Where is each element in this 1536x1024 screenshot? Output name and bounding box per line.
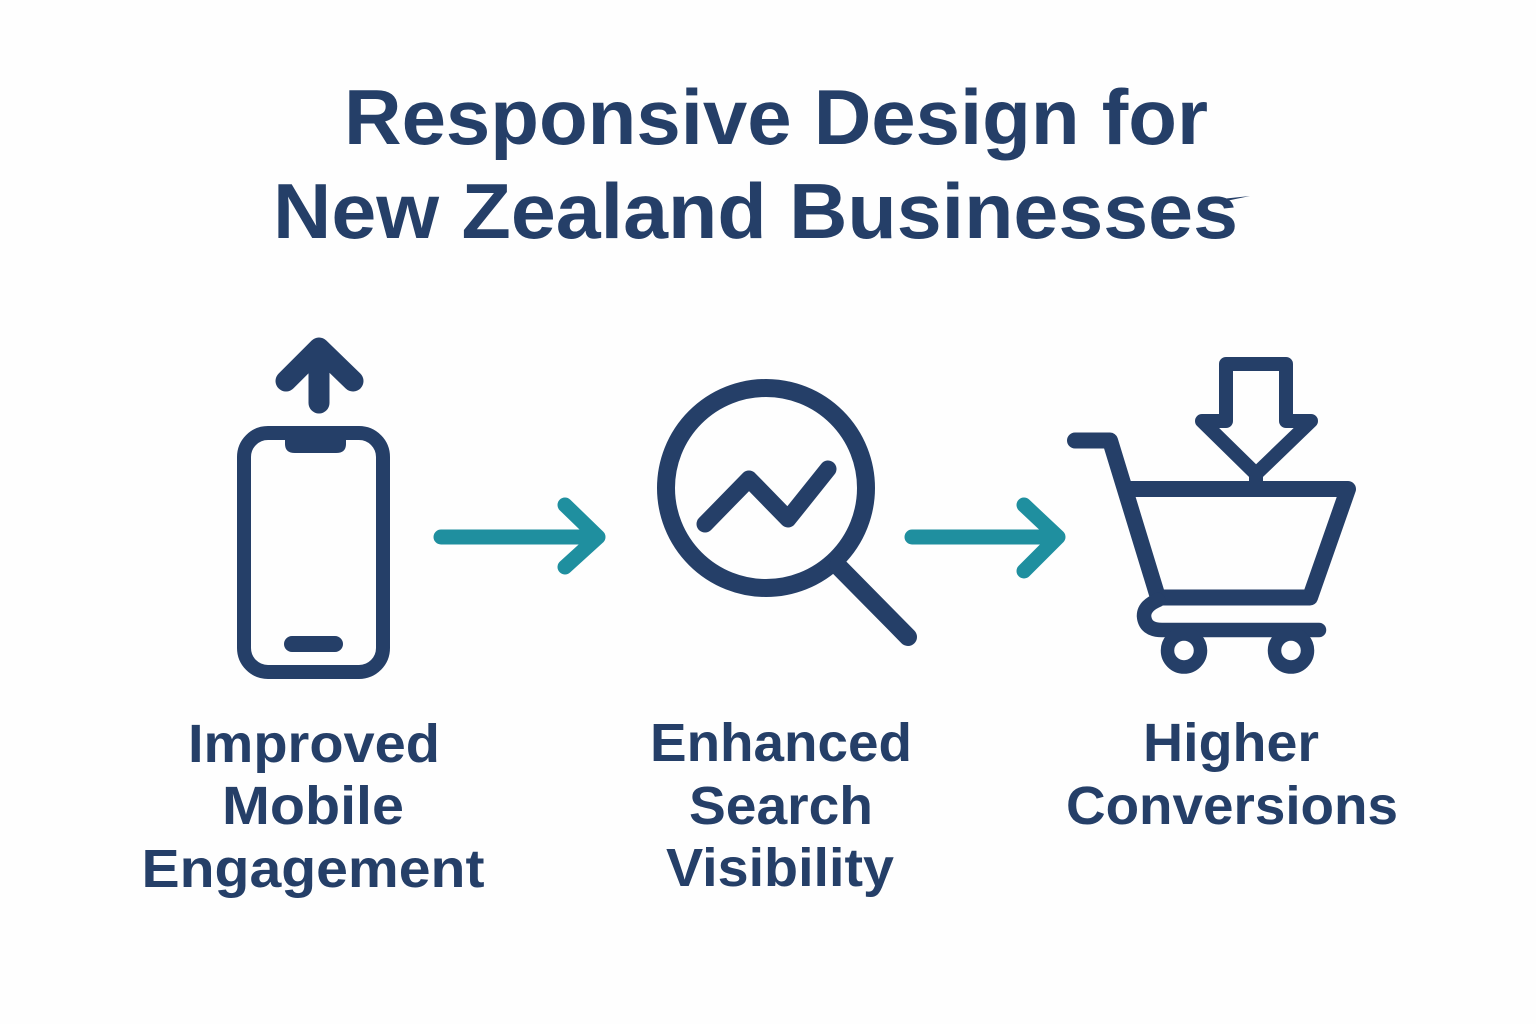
label: higher conversions: Conversions	[1066, 776, 1398, 836]
label: higher conversions: Higher	[1143, 713, 1319, 773]
handle	[838, 566, 908, 637]
label: improved mobile engagement: Improved	[188, 714, 440, 774]
label: improved mobile engagement: Engagement	[142, 839, 485, 899]
icon: shopping cart with down arrow	[1075, 364, 1348, 667]
arrow stem joining basket	[1249, 474, 1263, 488]
icon: magnifying glass with trend line	[666, 388, 908, 637]
icon: smartphone with up arrow	[244, 348, 383, 672]
label: improved mobile engagement	[142, 714, 485, 899]
label: higher conversions	[1066, 713, 1398, 836]
title: New Zealand Businesses	[273, 167, 1238, 255]
arrow: phone to search	[441, 505, 598, 567]
title	[273, 73, 1250, 255]
title: Responsive Design for	[344, 73, 1208, 161]
wheels	[1168, 634, 1200, 667]
arrow: search to cart	[912, 505, 1058, 571]
cart base	[1144, 600, 1319, 630]
label: enhanced search visibility: Visibility	[666, 838, 894, 898]
label: enhanced search visibility: Search	[689, 776, 873, 836]
lens	[666, 388, 866, 588]
label: enhanced search visibility: Enhanced	[650, 713, 912, 773]
label: improved mobile engagement: Mobile	[222, 776, 404, 836]
cart handle and basket	[1075, 440, 1348, 598]
phone notch	[285, 436, 346, 453]
trend line	[705, 469, 828, 524]
phone home bar	[292, 636, 335, 652]
label: enhanced search visibility	[650, 713, 912, 898]
down arrow	[1202, 364, 1311, 474]
phone body	[244, 433, 383, 672]
up arrow	[286, 348, 353, 403]
